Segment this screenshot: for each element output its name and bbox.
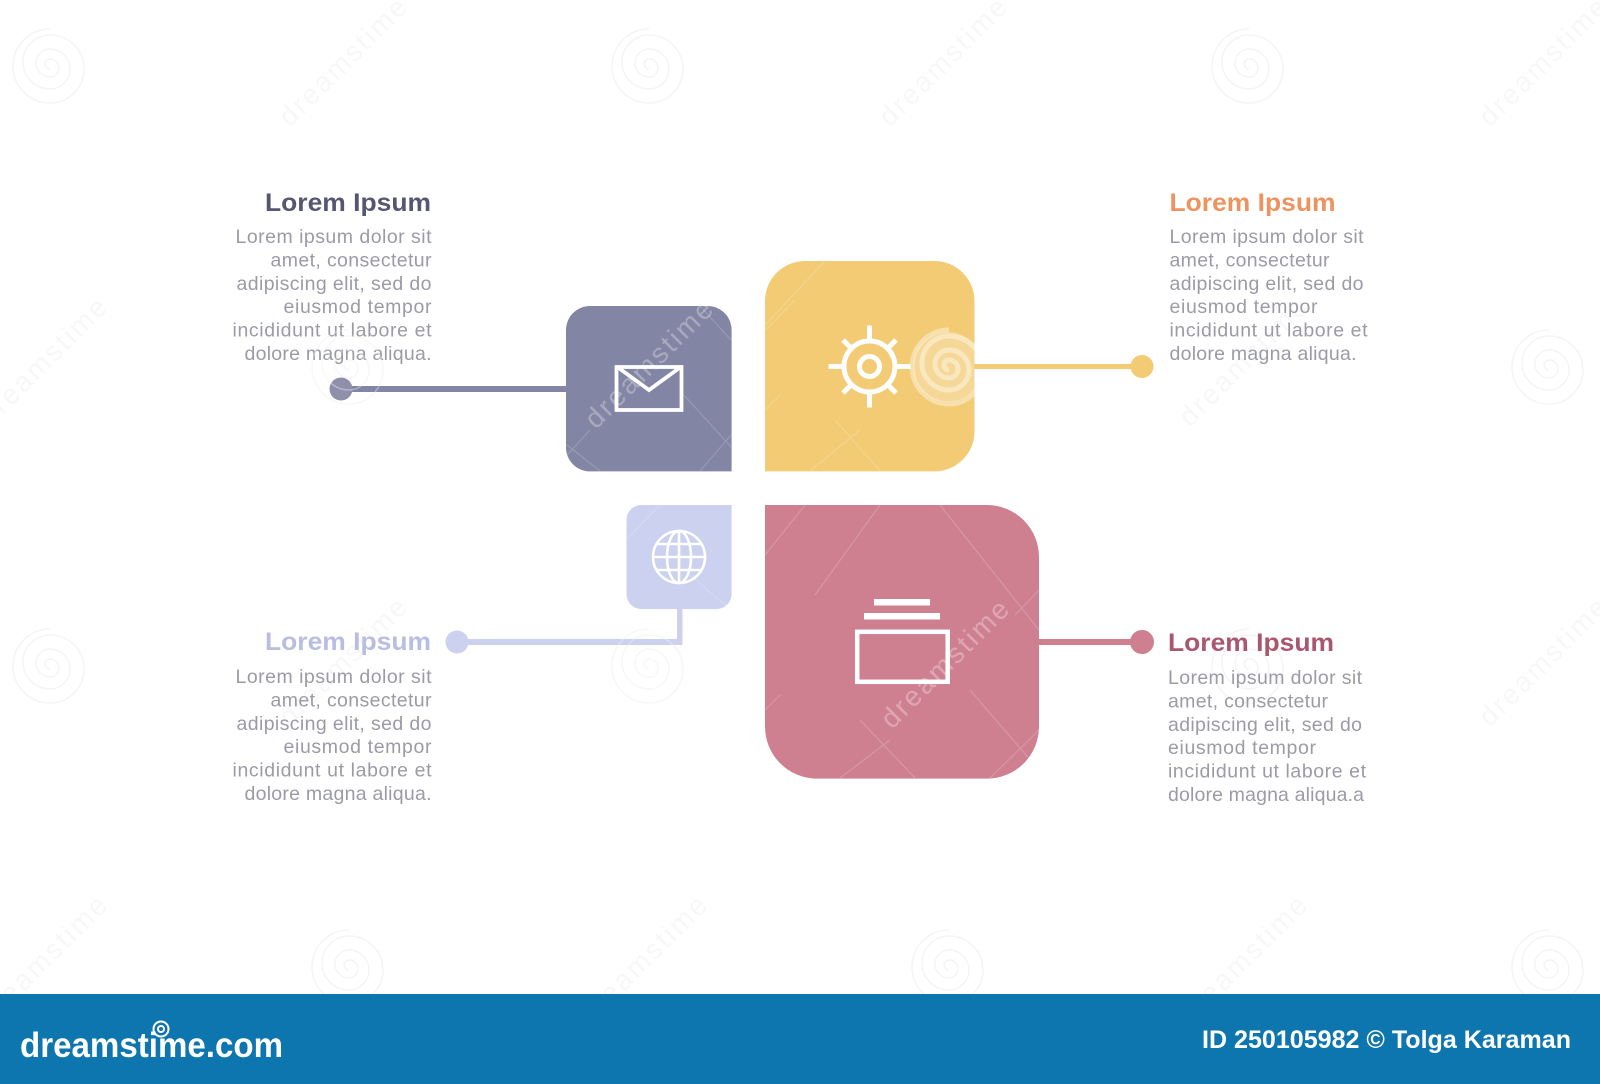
body: top left: adipiscing elit, sed do <box>236 273 432 295</box>
body: top right <box>1170 226 1368 365</box>
body: top left: Lorem ipsum dolor sit <box>236 226 432 248</box>
body: top right: adipiscing elit, sed do <box>1170 273 1364 295</box>
faint watermark layer on white: dreamstime <box>572 890 713 1030</box>
heading: top left: Lorem Ipsum <box>265 189 431 217</box>
body: bottom right: dolore magna aliqua.a <box>1168 784 1364 806</box>
text block: bottom right <box>1168 629 1367 806</box>
connector: mail <box>330 378 567 400</box>
heading: bottom left: Lorem Ipsum <box>265 628 431 656</box>
heading: bottom right: Lorem Ipsum <box>1168 629 1334 657</box>
icon: logo spiral <box>154 1022 168 1036</box>
body: bottom right: amet, consectetur <box>1168 690 1328 712</box>
faint watermark layer on white: dreamstime <box>1172 292 1313 432</box>
body: top right: dolore magna aliqua. <box>1170 343 1356 365</box>
body: top right: incididunt ut labore et <box>1170 320 1368 342</box>
icon: envelope <box>616 367 682 410</box>
icon: gear <box>828 326 910 408</box>
white watermark layer over the shapes <box>312 261 1039 778</box>
logo: dreamstime.com: dreamstime.com <box>20 1026 283 1065</box>
body: bottom left: eiusmod tempor <box>284 736 432 758</box>
text block: top right <box>1170 189 1368 365</box>
body: bottom left: dolore magna aliqua. <box>244 783 432 805</box>
white watermark layer over the shapes: dreamstime <box>874 594 1015 734</box>
footer banner <box>0 994 1600 1084</box>
body: top left: eiusmod tempor <box>284 296 432 318</box>
heading: top right: Lorem Ipsum <box>1170 189 1336 217</box>
body: bottom left: Lorem ipsum dolor sit <box>236 666 432 688</box>
panel: gear square <box>765 261 974 471</box>
connector: gear <box>974 355 1154 378</box>
icon: folder stack <box>857 599 948 682</box>
body: top left <box>232 226 432 365</box>
body: top left: incididunt ut labore et <box>232 320 432 342</box>
image credit: ID 250105982 © Tolga Karaman <box>1202 1026 1571 1054</box>
faint watermark layer on white: dreamstime <box>1172 890 1313 1030</box>
body: top right: eiusmod tempor <box>1170 296 1318 318</box>
body: top right: amet, consectetur <box>1170 249 1330 271</box>
body: bottom right: eiusmod tempor <box>1168 737 1316 759</box>
body: top left: dolore magna aliqua. <box>244 343 432 365</box>
body: bottom left <box>232 666 432 805</box>
body: bottom right: adipiscing elit, sed do <box>1168 714 1362 736</box>
text block: top left <box>232 189 432 365</box>
body: bottom left: incididunt ut labore et <box>232 760 432 782</box>
body: bottom right: Lorem ipsum dolor sit <box>1168 667 1363 689</box>
connector: globe <box>446 608 682 654</box>
body: bottom right <box>1168 667 1367 806</box>
body: top left: amet, consectetur <box>270 249 432 271</box>
body: top right: Lorem ipsum dolor sit <box>1170 226 1364 248</box>
faint watermark layer on white: dreamstime <box>272 592 413 732</box>
panel: folder square <box>765 505 1039 779</box>
panel: globe square <box>626 505 732 609</box>
body: bottom right: incididunt ut labore et <box>1168 761 1367 783</box>
white watermark layer over the shapes: dreamstime <box>578 294 719 434</box>
connector: folder <box>1038 630 1154 654</box>
body: bottom left: adipiscing elit, sed do <box>236 713 432 735</box>
icon: globe <box>653 531 705 583</box>
text block: bottom left <box>232 628 432 805</box>
body: bottom left: amet, consectetur <box>270 689 432 711</box>
panel: mail square <box>566 306 732 471</box>
